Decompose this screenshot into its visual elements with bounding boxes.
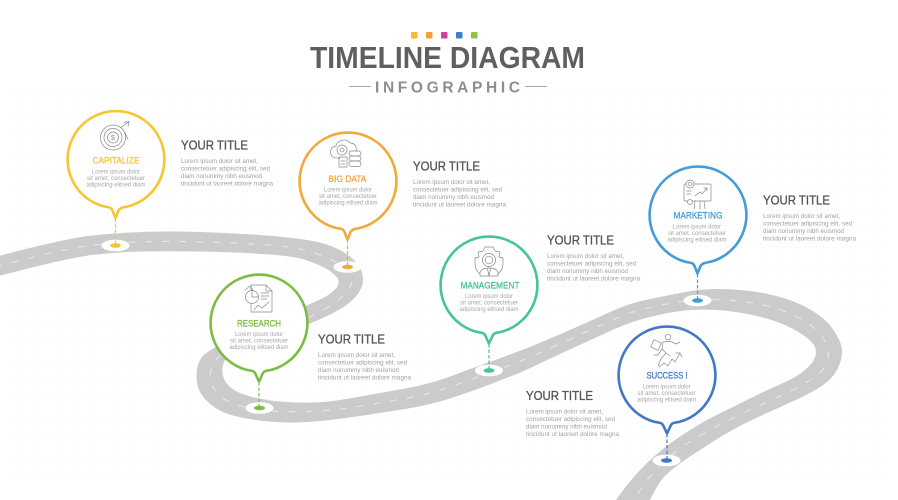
text block: capitalize: YOUR TITLE (181, 138, 248, 153)
text block: management (547, 233, 640, 282)
text block: marketing: YOUR TITLE (763, 193, 830, 208)
text block: research: tincidunt ut laoreet dolore magna (318, 374, 411, 382)
label: RESEARCH (237, 318, 281, 330)
text block: capitalize: Lorem ipsum dolor sit amet, (181, 158, 258, 165)
icon: report (245, 285, 272, 312)
pin: capitalize (68, 111, 164, 244)
description: sit amet, consectetuer (87, 176, 145, 182)
label: MARKETING (674, 210, 722, 222)
description: adipiscing elitsed diam (86, 182, 146, 188)
road (0, 232, 842, 500)
description: adipiscing elitsed diam (637, 398, 696, 404)
text block: management: YOUR TITLE (547, 233, 614, 248)
text block: management: Lorem ipsum dolor sit amet, (547, 253, 624, 260)
text block: management: tincidunt ut laoreet dolore magna (547, 276, 640, 282)
marker: capitalize (102, 240, 130, 251)
text block: research: Lorem ipsum dolor sit amet, (318, 352, 395, 359)
pin: marketing (650, 167, 746, 299)
text block: big data: YOUR TITLE (413, 159, 480, 174)
description: sit amet, consectetuer (230, 338, 288, 344)
text block: marketing (763, 193, 856, 242)
text block: research: YOUR TITLE (318, 332, 385, 347)
text block: capitalize (181, 138, 273, 188)
pin: big data (300, 133, 396, 265)
text block: marketing: diam nonummy nibh euismod (763, 228, 844, 235)
color dots (411, 32, 478, 38)
description (318, 188, 378, 206)
text block: marketing: Lorem ipsum dolor sit amet, (763, 213, 840, 220)
text block: management: consectetuer adipiscing elit, sed (547, 260, 636, 268)
text block: research: diam nonummy nibh euismod (318, 367, 399, 374)
text block: big data: consectetuer adipiscing elit, sed (413, 186, 502, 194)
description: Lorem ipsum dolor (673, 224, 721, 230)
description (86, 170, 146, 188)
icon: coin maze: $ (111, 135, 115, 142)
text block: big data: Lorem ipsum dolor sit amet, (413, 179, 490, 186)
marker: marketing (684, 295, 712, 306)
icon: presentation board (684, 180, 711, 209)
text block: success: YOUR TITLE (526, 388, 593, 403)
text block: big data: diam nonummy nibh euismod (413, 194, 494, 201)
label: BIG DATA (328, 174, 367, 185)
text block: capitalize: tincidunt ut laoreet dolore magna (181, 180, 273, 188)
marker: big data (334, 261, 362, 273)
pin: management (441, 237, 537, 369)
description: adipiscing elitsed diam (460, 307, 518, 313)
marker: management (475, 365, 503, 376)
text block: management: diam nonummy nibh euismod (547, 268, 628, 275)
text block: capitalize: diam nonummy nibh euismod (181, 173, 262, 180)
description: Lorem ipsum dolor (324, 188, 372, 194)
description: Lorem ipsum dolor (642, 384, 691, 390)
description: sit amet, consectetuer (319, 194, 377, 200)
title: TIMELINE DIAGRAM (310, 41, 585, 75)
description: sit amet, consectetuer (460, 300, 518, 306)
text block: marketing: consectetuer adipiscing elit, sed (763, 220, 852, 228)
label: SUCCESS ! (646, 370, 688, 382)
description: adipiscing elitsed diam (668, 238, 726, 244)
description: Lorem ipsum dolor (235, 332, 283, 338)
label: MANAGEMENT (460, 280, 520, 292)
pin: success (619, 327, 715, 459)
text block: success: tincidunt ut laoreet dolore magna (526, 431, 619, 438)
description: adipiscing elitsed diam (318, 200, 378, 206)
text block: research: consectetuer adipiscing elit, sed (318, 360, 407, 366)
description (230, 332, 288, 351)
description: sit amet, consectetuer (668, 231, 726, 237)
description (460, 294, 518, 313)
description: sit amet, consectetuer (638, 391, 696, 397)
description: Lorem ipsum dolor (465, 294, 513, 300)
description: Lorem ipsum dolor (92, 170, 140, 176)
text block: success (526, 388, 619, 438)
text block: marketing: tincidunt ut laoreet dolore magna (763, 236, 856, 242)
marker: research (246, 402, 274, 414)
icon: cloud database (330, 140, 361, 167)
description (637, 384, 696, 404)
text block: big data: tincidunt ut laoreet dolore magna (413, 202, 506, 208)
label: CAPITALIZE (92, 156, 140, 166)
pin: research (211, 275, 307, 407)
text block: success: consectetuer adipiscing elit, sed (526, 416, 615, 423)
text block: big data (413, 159, 506, 208)
text block: success: Lorem ipsum dolor sit amet, (526, 408, 603, 416)
description: adipiscing elitsed diam (230, 345, 288, 351)
marker: success (652, 455, 680, 466)
text block: capitalize: consectetuer adipiscing elit, sed (181, 166, 270, 172)
icon: running businessman (651, 334, 682, 367)
description (668, 224, 726, 244)
icon: gear person (475, 247, 503, 276)
text block: research (318, 332, 411, 382)
subtitle: INFOGRAPHIC (375, 80, 520, 96)
text block: success: diam nonummy nibh euismod (526, 424, 607, 430)
